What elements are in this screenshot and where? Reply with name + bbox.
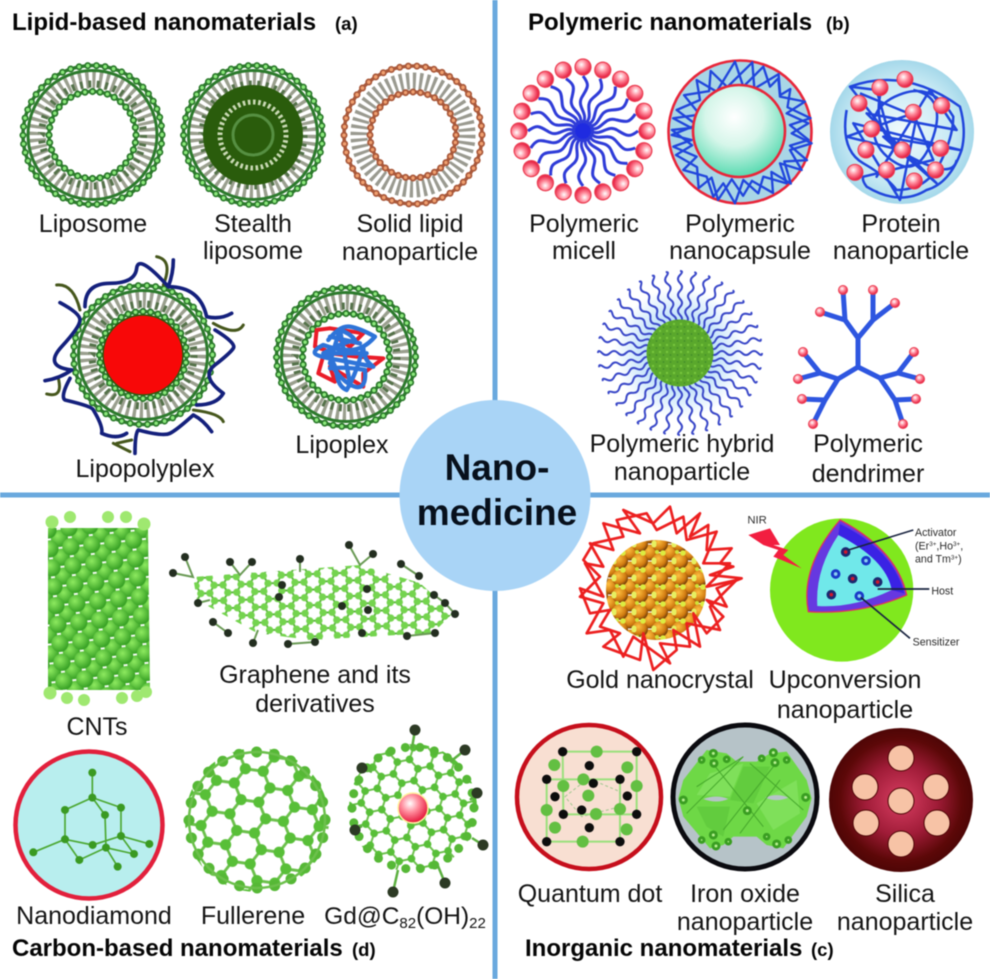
heading: carbon-based nanomaterials: Carbon-based nanomaterials (12, 935, 343, 962)
carbon nanotubes: CNTs (66, 713, 128, 741)
Gd@C82(OH)22: Gd@C (324, 903, 399, 930)
upconversion nanoparticle: nanoparticle (777, 696, 913, 724)
upconversion nanoparticle: 3+ (953, 541, 961, 548)
heading: inorganic nanomaterials: (c) (811, 939, 834, 960)
polymeric nanocapsule: nanocapsule (669, 237, 811, 265)
polymeric dendrimer: Polymeric (813, 430, 923, 458)
upconversion nanoparticle: , (960, 540, 963, 552)
Gd@C82(OH)22: (OH) (416, 903, 469, 930)
polymeric micelle (511, 59, 655, 265)
heading: carbon-based nanomaterials: (d) (352, 939, 376, 960)
lipoplex: Lipoplex (295, 431, 389, 459)
heading: inorganic nanomaterials: Inorganic nanomaterials (525, 935, 802, 962)
fullerene: Fullerene (201, 902, 305, 930)
polymeric hybrid nanoparticle (590, 271, 774, 486)
fullerene (185, 748, 329, 930)
central circle: Nano-medicine: Nano- (445, 447, 549, 488)
solid lipid nanoparticle: Solid lipid (356, 210, 464, 238)
upconversion nanoparticle: Sensitizer (913, 636, 960, 648)
panel: lipid-based nanomaterials (12, 9, 482, 483)
upconversion nanoparticle: Upconversion (769, 666, 921, 694)
heading: polymeric nanomaterials: (b) (826, 13, 850, 34)
icon: NIR lightning bolt: NIR (747, 514, 767, 526)
central circle: Nano-medicine: medicine (417, 492, 577, 533)
upconversion nanoparticle: Activator (915, 527, 957, 539)
stealth liposome (184, 66, 322, 265)
central circle: Nano-medicine (400, 400, 590, 591)
nanodiamond: Nanodiamond (16, 902, 172, 930)
upconversion nanoparticle: and Tm (915, 554, 951, 566)
silica nanoparticle (829, 728, 973, 936)
heading: lipid-based nanomaterials: Lipid-based nanomaterials (12, 9, 316, 36)
Gd@C82(OH)22: 82 (399, 915, 416, 932)
upconversion nanoparticle: ,Ho (936, 540, 953, 552)
protein nanoparticle: Protein (861, 210, 941, 238)
nanodiamond (16, 752, 172, 930)
polymeric micelle: micell (552, 237, 616, 265)
polymeric dendrimer (794, 286, 924, 488)
heading: polymeric nanomaterials: Polymeric nanomaterials (528, 9, 812, 36)
silica nanoparticle: nanoparticle (837, 908, 973, 936)
polymeric micelle: Polymeric (529, 210, 639, 238)
solid lipid nanoparticle (342, 66, 482, 266)
horizontal divider (0, 492, 990, 498)
stealth liposome: Stealth (214, 210, 292, 238)
iron oxide nanoparticle (673, 725, 817, 936)
icon: NIR lightning bolt (747, 514, 802, 568)
Gd@C82(OH)22 (324, 724, 488, 932)
upconversion nanoparticle (747, 514, 963, 724)
graphene and its derivatives: derivatives (255, 690, 375, 718)
upconversion nanoparticle: (Er (915, 540, 929, 552)
iron oxide nanoparticle: nanoparticle (677, 908, 813, 936)
polymeric nanocapsule (657, 47, 827, 265)
graphene and its derivatives: Graphene and its (219, 661, 411, 689)
gold nanocrystal: Gold nanocrystal (566, 666, 754, 694)
liposome: Liposome (39, 210, 147, 238)
polymeric dendrimer: dendrimer (812, 460, 924, 488)
liposome (23, 66, 162, 238)
lipoplex (276, 288, 416, 459)
gold nanocrystal (566, 507, 754, 694)
quantum dot (517, 725, 662, 908)
upconversion nanoparticle: 3+ (951, 554, 958, 561)
graphene and its derivatives (169, 541, 459, 718)
quantum dot: Quantum dot (518, 880, 662, 908)
protein nanoparticle (830, 60, 974, 265)
polymeric hybrid nanoparticle: Polymeric hybrid (590, 430, 774, 458)
upconversion nanoparticle: ) (958, 554, 962, 566)
stealth liposome: liposome (203, 237, 303, 265)
solid lipid nanoparticle: nanoparticle (342, 238, 478, 266)
heading: lipid-based nanomaterials: (a) (335, 13, 358, 34)
vertical divider (492, 0, 498, 979)
lipopolyplex (45, 257, 243, 483)
silica nanoparticle: Silica (875, 880, 935, 908)
panel: polymeric nanomaterials (511, 9, 974, 488)
protein nanoparticle: nanoparticle (833, 237, 969, 265)
polymeric nanocapsule: Polymeric (685, 210, 795, 238)
panel: carbon-based nanomaterials (12, 511, 488, 962)
iron oxide nanoparticle: Iron oxide (690, 880, 800, 908)
upconversion nanoparticle: 3+ (929, 541, 937, 548)
carbon nanotubes (44, 511, 152, 741)
lipopolyplex: Lipopolyplex (76, 455, 215, 483)
upconversion nanoparticle: Host (931, 586, 953, 598)
Gd@C82(OH)22: 22 (469, 915, 486, 932)
panel: inorganic nanomaterials (517, 507, 973, 962)
polymeric hybrid nanoparticle: nanoparticle (614, 458, 750, 486)
